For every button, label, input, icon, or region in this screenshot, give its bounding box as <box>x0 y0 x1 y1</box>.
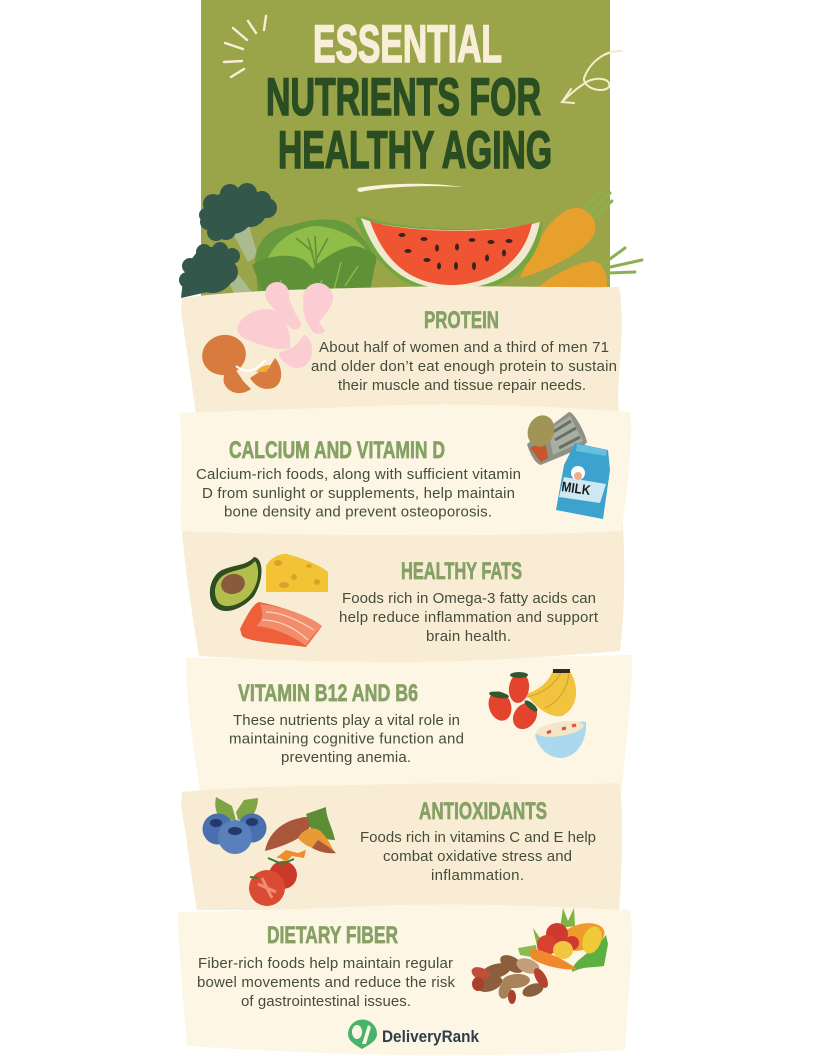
text block <box>339 590 599 645</box>
heading: VITAMIN B12 AND B6 <box>238 680 418 707</box>
icon: avocado <box>210 557 262 611</box>
icon: tomatoes <box>249 858 297 906</box>
title: ESSENTIAL <box>313 15 502 74</box>
icon: vegetables <box>518 908 608 972</box>
icon: milk carton: MILK <box>561 478 592 498</box>
icon: chicken pieces <box>237 282 333 368</box>
text block <box>311 339 617 394</box>
text block: their muscle and tissue repair needs. <box>338 377 586 394</box>
text block: inflammation. <box>431 867 524 884</box>
icon: logo mark <box>348 1019 377 1049</box>
panel: vitamin B12 and B6 <box>186 655 632 790</box>
text block: and older don’t eat enough protein to sustain <box>311 358 617 375</box>
watermelon <box>355 216 543 293</box>
text block: of gastrointestinal issues. <box>241 993 411 1010</box>
heading: HEALTHY FATS <box>401 558 522 585</box>
icon: milk carton <box>556 443 610 519</box>
header panel <box>179 0 642 300</box>
icon: salmon <box>240 602 322 647</box>
text block: Calcium-rich foods, along with sufficient vitamin <box>196 466 521 483</box>
text block: These nutrients play a vital role in <box>233 712 460 729</box>
text block <box>229 712 464 766</box>
title underline <box>357 184 463 192</box>
title: HEALTHY AGING <box>278 121 552 180</box>
title <box>266 15 552 180</box>
heading: ANTIOXIDANTS <box>419 798 547 825</box>
icon: strawberries, bananas and bowl <box>485 669 586 758</box>
heading: CALCIUM AND VITAMIN D <box>229 437 445 464</box>
text block: Foods rich in Omega-3 fatty acids can <box>342 590 596 607</box>
text block: D from sunlight or supplements, help maintain <box>202 485 515 502</box>
title: NUTRIENTS FOR <box>266 68 541 127</box>
text block <box>360 829 596 884</box>
icon: eggs <box>198 330 281 393</box>
text block: bone density and prevent osteoporosis. <box>224 504 492 520</box>
heading: DIETARY FIBER <box>267 922 398 949</box>
panel: healthy fats <box>181 522 624 662</box>
cabbage <box>252 219 377 295</box>
text block: About half of women and a third of men 71 <box>319 339 609 356</box>
icon: cheese <box>266 554 328 592</box>
text block <box>196 466 521 520</box>
text block: preventing anemia. <box>281 749 411 766</box>
icon: sardine can <box>523 412 587 465</box>
heading: PROTEIN <box>424 307 499 334</box>
text block: Fiber-rich foods help maintain regular <box>198 955 453 972</box>
panel: protein <box>181 282 622 415</box>
panel: antioxidants <box>181 783 622 910</box>
text block: brain health. <box>426 628 511 645</box>
brand name: DeliveryRank <box>382 1027 479 1046</box>
text block: help reduce inflammation and support <box>339 609 599 626</box>
text block <box>197 955 456 1010</box>
text block: combat oxidative stress and <box>383 848 572 865</box>
logo <box>348 1019 479 1049</box>
sparkle lines <box>224 16 266 77</box>
broccoli <box>179 183 277 298</box>
panel: calcium and vitamin D <box>180 404 631 535</box>
text block: bowel movements and reduce the risk <box>197 974 456 991</box>
panel: dietary fiber <box>178 904 632 1055</box>
curly arrow <box>562 51 622 103</box>
text block: maintaining cognitive function and <box>229 730 464 748</box>
icon: sweet potato and turmeric <box>265 807 336 862</box>
icon: brazil nuts <box>469 951 551 1004</box>
carrots <box>520 192 642 292</box>
icon: blueberries <box>202 797 266 854</box>
text block: Foods rich in vitamins C and E help <box>360 829 596 846</box>
